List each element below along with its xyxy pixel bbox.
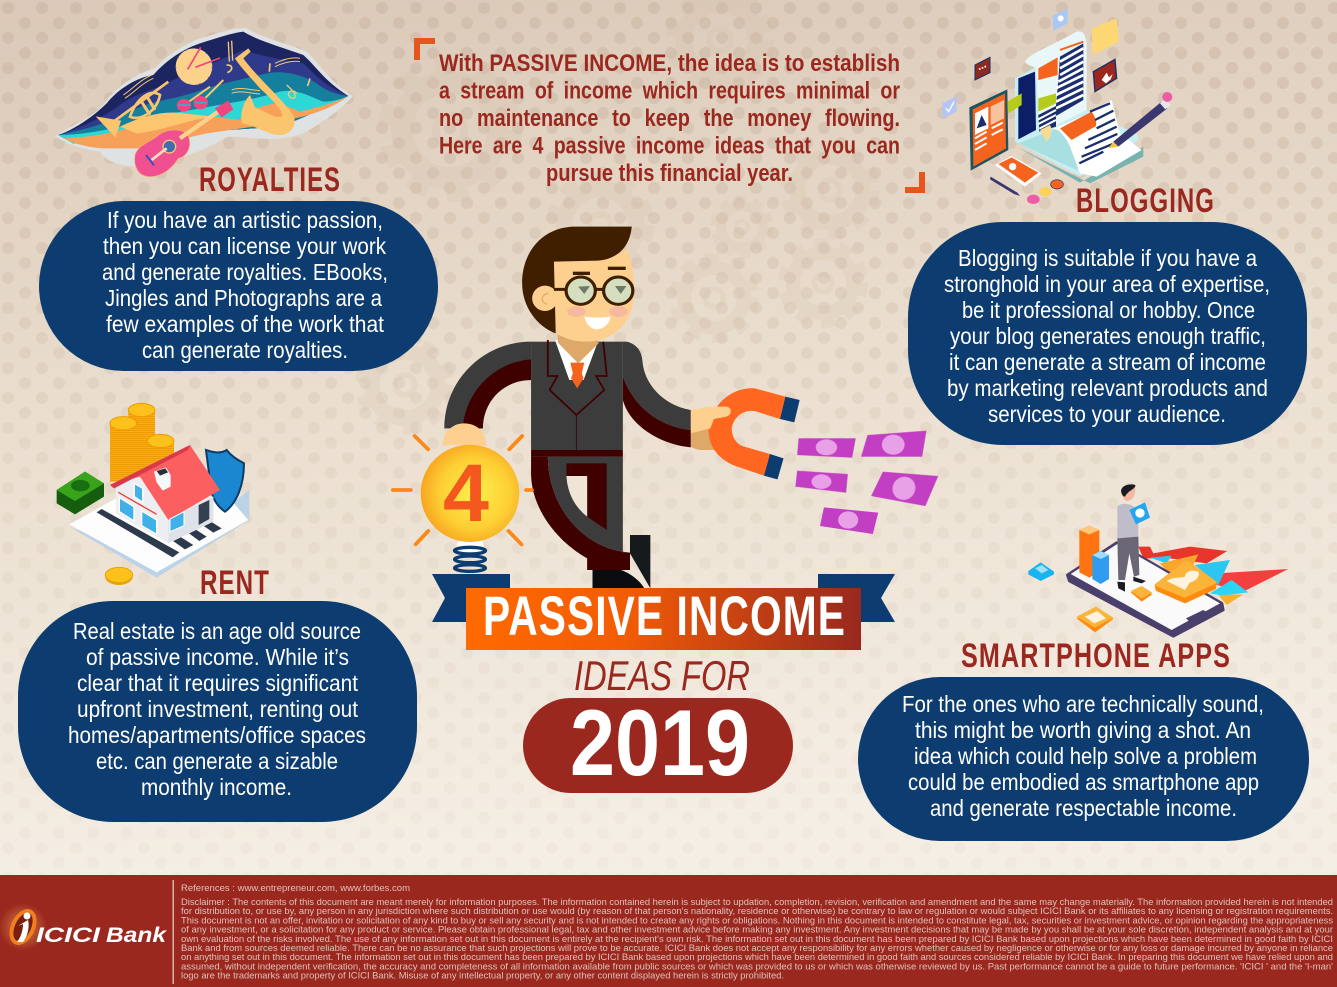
panel: rent: upfront investment, renting out	[77, 696, 359, 722]
icon: tick tile	[942, 96, 957, 118]
text block: disclaimer: logo are the trademarks and property of ICICI Bank. Misuse of any intellectual property, or any other content displayed herein is strictly prohibited.	[181, 971, 784, 982]
icon: saxophone	[235, 48, 295, 135]
panel: rent: Real estate is an age old source	[73, 618, 361, 644]
icon: house	[110, 445, 220, 543]
panel: blogging: your blog generates enough traffic,	[950, 323, 1266, 349]
text block: introduction: Here are 4 passive income ideas that you can	[439, 132, 900, 160]
icon: hand lower	[691, 427, 716, 450]
icon: shield	[206, 450, 244, 512]
panel: smartphone apps: idea which could help solve a problem	[914, 743, 1257, 769]
panel: royalties: few examples of the work that	[106, 311, 385, 337]
icon: mail tile	[1077, 607, 1113, 632]
panel: royalties: then you can license your work	[103, 233, 386, 259]
panel: rent: homes/apartments/office spaces	[68, 722, 366, 748]
panel: blogging: it can generate a stream of income	[949, 349, 1266, 375]
icon: spring	[455, 540, 485, 571]
panel: smartphone apps	[858, 677, 1309, 841]
icon: curled page	[1040, 100, 1142, 177]
panel: smartphone apps: and generate respectable income.	[930, 795, 1237, 821]
text block: introduction	[439, 50, 900, 187]
icon: rays	[393, 436, 532, 544]
icon: ICICI Bank logo: ICICI	[36, 924, 102, 947]
icon: drum	[176, 47, 220, 85]
icon: star tile	[1093, 59, 1117, 92]
icon: big user tile	[1156, 561, 1216, 602]
panel: royalties: If you have an artistic passion,	[107, 207, 383, 233]
panel: blogging: by marketing relevant products and	[947, 375, 1268, 401]
icon: top-left bracket	[414, 38, 435, 60]
icon: clipboard	[969, 89, 1008, 171]
number 4: 4	[443, 448, 489, 539]
icon: small tile	[1131, 586, 1152, 602]
icon: music instruments illustration	[55, 28, 353, 177]
icon: sheet music	[123, 41, 310, 98]
figure: legs and shoes	[531, 450, 650, 588]
icon: person	[1117, 484, 1150, 592]
icon: glasses	[554, 277, 633, 304]
icon: ICICI Bank logo	[0, 903, 168, 951]
panel: rent: monthly income.	[141, 774, 292, 800]
heading: rent: RENT	[200, 564, 270, 602]
text block: disclaimer: Bank and from sources deemed reliable. There can be no assurance that such projections will prove to be accurate. ICICI Bank does not accept any responsibility for any errors whether caused by negligence or otherwise or for any loss or damage incurred by anyone in reliance	[181, 943, 1333, 954]
text block: disclaimer: own evaluation of the risks involved. The use of any information set out in this document is entirely at the recipient's own risk. The information set out in this document has been prepared by ICICI Bank based upon projections which have been determined in good faith by ICICI	[181, 934, 1333, 945]
icon: coloured shards	[1138, 547, 1288, 605]
year pill: 2019	[570, 690, 750, 795]
icon: ICICI Bank logo: Bank	[106, 924, 168, 947]
icon: mail tile	[1007, 93, 1022, 113]
icon: money notes	[795, 431, 938, 534]
panel: blogging	[908, 222, 1307, 445]
icon: maracas	[177, 80, 223, 112]
icon: cash stack	[57, 472, 104, 514]
icon: bulb	[421, 445, 519, 542]
panel: smartphone apps: could be embodied as smartphone app	[908, 769, 1259, 795]
text block: disclaimer: assumed, without independent verification, the accuracy and completeness of all information available from public sources or which was provided to us or which was otherwise reviewed by us. Past performance cannot be a guide to future performance. 'ICICI ' and the 'I-man'	[181, 961, 1333, 972]
icon: phone	[995, 156, 1042, 187]
panel: rent: etc. can generate a sizable	[96, 748, 338, 774]
icon: folder	[1092, 18, 1119, 55]
icon: bottom-right bracket	[905, 172, 925, 193]
icon: horseshoe magnet	[709, 388, 800, 479]
text block: disclaimer: Disclaimer : The contents of this document are meant merely for information purposes. The information contained herein is subject to updation, completion, revision, verification and amendment and the same may change materially. The information provided herein is not intended	[181, 897, 1333, 908]
title banner: PASSIVE INCOME	[483, 584, 846, 647]
icon: small pencil	[990, 177, 1020, 196]
icon: fingers	[691, 407, 731, 433]
text block: disclaimer: on anything set out in this document. The information set out in this document has been prepared by ICICI Bank based upon projections which have been determined in good faith and sources considered reliable by ICICI Bank. In preparing this document we have relied upon and	[181, 952, 1333, 963]
panel: blogging: stronghold in your area of expertise,	[944, 271, 1270, 297]
panel: rent: clear that it requires significant	[77, 670, 359, 696]
icon: chat tile	[975, 57, 990, 80]
panel: smartphone apps: For the ones who are technically sound,	[902, 691, 1264, 717]
panel: blogging: Blogging is suitable if you have a	[958, 245, 1257, 271]
icon: guitar	[135, 101, 233, 177]
icon: toggle tile	[1028, 562, 1054, 581]
icon: phone	[1067, 543, 1223, 636]
panel: royalties: and generate royalties. EBooks,	[102, 259, 388, 285]
ribbon left	[432, 574, 510, 622]
panel: royalties: Jingles and Photographs are a	[105, 285, 382, 311]
figure: head	[522, 227, 634, 342]
subtitle: IDEAS FOR	[574, 652, 750, 699]
panel: blogging: be it professional or hobby. Once	[962, 297, 1255, 323]
icon: user tile	[1053, 8, 1068, 31]
icon: bar chart	[1079, 526, 1109, 584]
panel: blogging: services to your audience.	[988, 401, 1226, 427]
text block: introduction: With PASSIVE INCOME, the idea is to establish	[439, 50, 900, 77]
figure: suit	[444, 333, 691, 450]
text block: disclaimer: for distribution to, or use by, any person in any jurisdiction where such distribution or use would (by reason of that person's nationality, residence or otherwise) be contrary to law or regulation or would subject ICICI Bank or its affiliates to any licensing or registration requirements.	[181, 906, 1333, 917]
text block: introduction: a stream of income which requires minimal or	[439, 78, 900, 104]
text block: introduction: pursue this financial year.	[546, 160, 793, 187]
icon: blogging illustration	[942, 8, 1172, 204]
panel: rent	[18, 601, 417, 822]
text block: introduction: no maintenance to keep the money flowing.	[439, 105, 900, 132]
heading: blogging: BLOGGING	[1076, 182, 1215, 220]
panel: smartphone apps: this might be worth giving a shot. An	[915, 717, 1251, 743]
illustration: businessman with magnet and bulb	[393, 227, 938, 588]
icon: trumpet	[99, 82, 168, 135]
text block: disclaimer	[181, 897, 1333, 982]
panel: royalties	[39, 201, 438, 371]
heading: smartphone apps: SMARTPHONE APPS	[961, 637, 1231, 675]
icon: coin	[105, 567, 133, 585]
footer	[0, 875, 1337, 987]
icon: house and coins	[57, 403, 249, 585]
icon: paper sheet	[1025, 31, 1087, 132]
text block: disclaimer: of any investment, or a solicitation for any product or service. Please obtain professional legal, tax and other investment advice before making any investment. Any investment decisions that may be made by you shall be at your sole discretion, independent analysis and at your	[181, 925, 1333, 936]
text block: references: References : www.entrepreneur.com, www.forbes.com	[181, 883, 410, 894]
icon: coin stacks	[110, 403, 174, 482]
text block: disclaimer: This document is not an offer, invitation or solicitation of any kind to buy or sell any security and is not intended to create any rights or obligations. Nothing in this document is intended to constitute legal, tax, securities or investment advice, or opinion regarding the appropriateness	[181, 915, 1333, 926]
icon: smartphone apps illustration	[1028, 484, 1288, 636]
icon: buttons	[1027, 180, 1063, 204]
panel: rent: of passive income. While it’s	[86, 644, 349, 670]
heading: royalties: ROYALTIES	[199, 161, 341, 199]
icon: hand on bulb	[442, 423, 486, 446]
icon: pencil	[1108, 92, 1172, 148]
panel: royalties: can generate royalties.	[142, 337, 348, 363]
ribbon right	[818, 574, 895, 622]
